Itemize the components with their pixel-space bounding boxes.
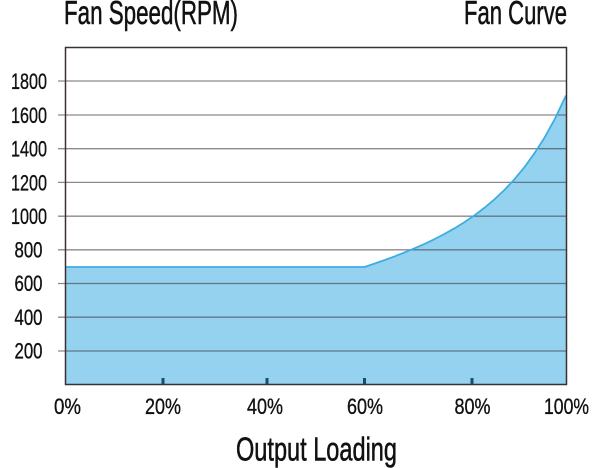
- y axis labels: 200: [14, 338, 42, 364]
- x axis labels: 60%: [347, 394, 383, 419]
- area under fan curve: [66, 96, 566, 384]
- x axis labels: 80%: [454, 394, 490, 419]
- y axis labels: 1200: [11, 170, 47, 196]
- y axis labels: 1600: [11, 103, 47, 128]
- x axis labels: 20%: [145, 394, 181, 419]
- y axis labels: 1400: [11, 136, 47, 162]
- horizontal grid lines: [58, 81, 566, 351]
- x axis tick marks: [162, 378, 474, 384]
- plot frame: [66, 48, 566, 384]
- x axis labels: [54, 394, 589, 419]
- y axis labels: 800: [14, 238, 42, 262]
- x axis labels: 40%: [247, 394, 283, 419]
- y axis labels: 1000: [11, 204, 47, 229]
- y axis labels: [11, 69, 47, 364]
- y axis labels: 400: [14, 305, 42, 330]
- y axis labels: 600: [14, 271, 42, 296]
- x axis labels: 100%: [544, 394, 589, 419]
- x axis labels: 0%: [54, 394, 81, 419]
- y axis labels: 1800: [11, 69, 47, 94]
- fan curve line: [66, 96, 566, 267]
- x axis title: Output Loading: [236, 430, 397, 468]
